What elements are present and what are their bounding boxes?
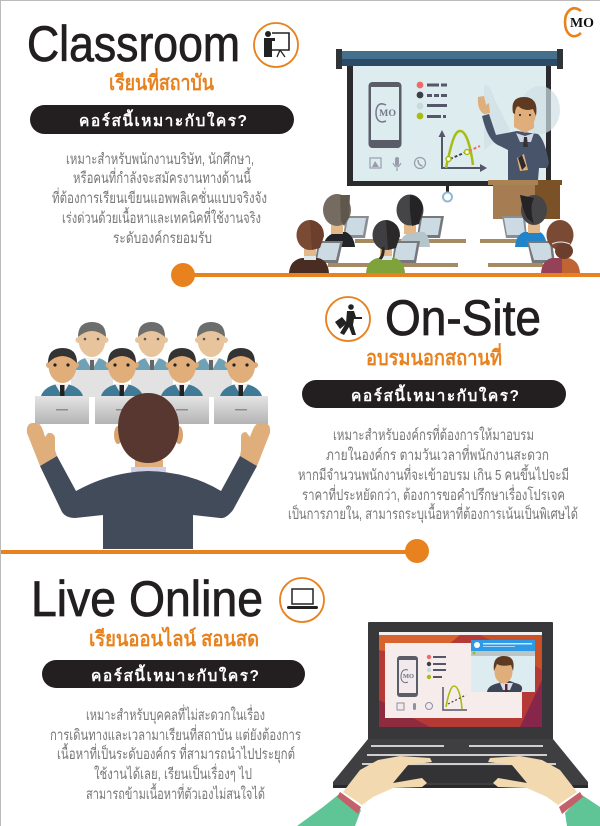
pill: who is this course for: คอร์สนี้เหมาะกับใคร?	[351, 384, 519, 405]
trainee back 2	[131, 322, 173, 397]
text block: Live Online description: เหมาะสำหรับบุคคลที่ไม่สะดวกในเรื่อง	[86, 704, 265, 725]
trainee front 1	[35, 348, 89, 424]
student: front centre	[366, 220, 420, 273]
student: front left	[289, 220, 343, 273]
screen content: phone, list, chart	[368, 82, 487, 172]
logo: CMO: MO	[570, 16, 594, 31]
text block: Live Online description	[50, 704, 301, 803]
student: front right	[527, 220, 580, 273]
heading: Classroom: Classroom	[27, 16, 240, 72]
student: back centre	[396, 194, 444, 247]
presenter left hand	[27, 423, 57, 466]
text block: Classroom description	[52, 151, 267, 247]
pill: who is this course for	[302, 380, 566, 408]
trainee back 3	[190, 322, 232, 397]
trainee back 1	[71, 322, 113, 397]
text block: Live Online description: การเดินทางและเวลามาเรียนที่สถาบัน แต่ยังต้องการ	[50, 724, 301, 744]
lecture window	[385, 643, 522, 718]
subheading: Live Online Thai: เรียนออนไลน์ สอนสด	[89, 626, 259, 651]
projector screen	[336, 49, 563, 202]
video chat window	[471, 640, 535, 692]
laptop base	[333, 739, 588, 788]
pill: who is this course for: คอร์สนี้เหมาะกับใคร?	[91, 664, 259, 685]
pill: who is this course for	[42, 660, 305, 688]
screen content: phone, list, chart: MO	[379, 108, 396, 118]
icon: walking businessman	[326, 297, 370, 341]
text block: Classroom description: ระดับองค์กรยอมรับ	[113, 230, 212, 247]
text block: Classroom description: ที่ต้องการเรียนเขียนแอพพลิเคชั่นแบบจริงจัง	[52, 187, 267, 207]
laptop lid	[368, 622, 553, 740]
logo: CMO	[565, 8, 594, 36]
illustration: laptop with hands	[297, 622, 600, 826]
subheading: On-Site Thai: อบรมนอกสถานที่	[366, 342, 502, 370]
icon: laptop	[280, 578, 324, 622]
illustration: audience and presenter	[27, 322, 270, 549]
text block: Live Online description: สามารถข้ามเนื้อหาที่ตัวเองไม่สนใจได้	[86, 783, 265, 803]
desks	[328, 239, 543, 267]
left hand and sleeve	[297, 756, 432, 826]
heading: Live Online: Live Online	[31, 571, 263, 627]
podium	[488, 180, 562, 219]
text block: On-Site description	[288, 424, 578, 524]
divider: orange timeline 1	[171, 263, 600, 287]
text block: Classroom description: หรือคนที่กำลังจะสมัครงานทางด้านนี้	[73, 167, 251, 187]
trainee front 2	[95, 348, 149, 424]
subheading: Classroom Thai: เรียนที่สถาบัน	[109, 67, 215, 95]
text block: On-Site description: ภายในองค์กร ตามวันเวลาที่พนักงานสะดวก	[326, 444, 549, 464]
divider: orange timeline 2	[1, 539, 429, 563]
text block: Classroom description: เร่งด่วนด้วยเนื้อหาและเทคนิคที่ใช้งานจริง	[62, 207, 261, 227]
text block: Live Online description: เนื้อหาที่เป็นระดับองค์กร ที่สามารถนำไปประยุกต์	[57, 743, 295, 764]
back row trainees	[71, 322, 232, 397]
presenter right hand	[240, 423, 270, 466]
student: right back	[502, 195, 547, 247]
text block: Classroom description: เหมาะสำหรับพนักงานบริษัท, นักศึกษา,	[66, 151, 254, 168]
text block: On-Site description: เหมาะสำหรับองค์กรที่ต้องการให้มาอบรม	[333, 424, 534, 444]
presenter from behind	[27, 393, 270, 549]
student: back left	[323, 194, 369, 247]
pill: who is this course for: คอร์สนี้เหมาะกับใคร?	[79, 109, 247, 130]
heading: On-Site: On-Site	[385, 290, 541, 346]
teacher	[478, 96, 549, 180]
front row trainees	[35, 348, 268, 424]
illustration: classroom	[289, 49, 580, 273]
lecture window: MO	[403, 674, 414, 680]
text block: Live Online description: ใช้งานได้เลย, เรียนเป็นเรื่องๆ ไป	[94, 763, 252, 783]
right hand and sleeve	[488, 756, 600, 826]
pill: who is this course for	[30, 105, 294, 134]
icon: teacher at board	[254, 23, 298, 67]
trainee front 3	[155, 348, 209, 424]
trainee front 4	[214, 348, 268, 424]
